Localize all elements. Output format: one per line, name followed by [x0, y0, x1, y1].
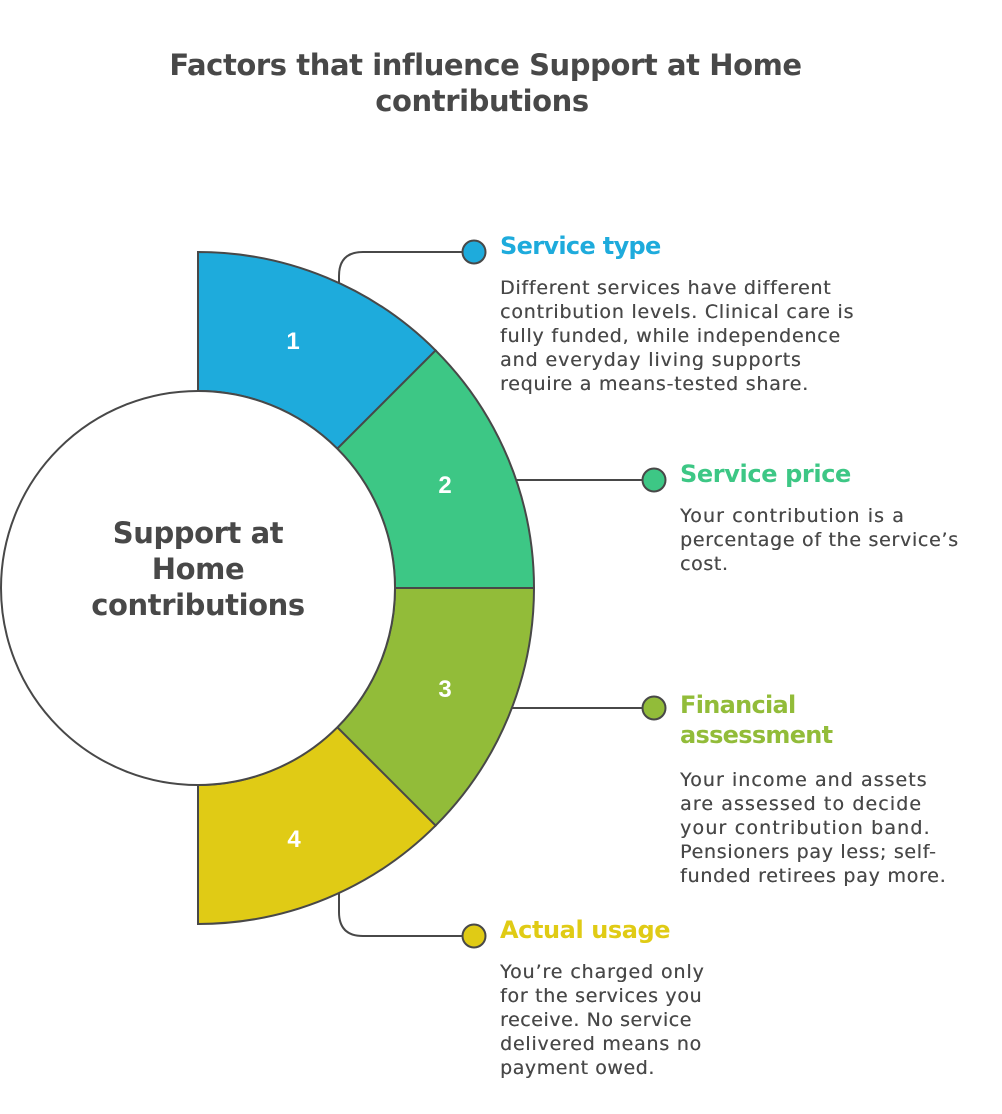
text: service type: Different services have different	[500, 277, 831, 299]
heading: service price: Service price	[680, 460, 851, 488]
text: service type: contribution levels. Clinical care is	[500, 301, 854, 323]
text: actual usage: delivered means no	[500, 1033, 702, 1055]
segment 3	[337, 588, 534, 826]
center label: contributions	[91, 588, 305, 622]
center label	[91, 516, 305, 622]
segment 2	[337, 350, 534, 588]
segment 4	[198, 727, 436, 924]
text: actual usage: for the services you	[500, 985, 702, 1007]
text: financial assessment: Pensioners pay less; self-	[680, 841, 937, 863]
text: service type	[500, 277, 854, 395]
text: actual usage: You’re charged only	[500, 961, 705, 983]
dot: financial assessment	[642, 696, 666, 720]
title	[169, 48, 802, 118]
text: financial assessment: funded retirees pay more.	[680, 865, 946, 887]
text: service price: Your contribution is a	[680, 505, 905, 527]
dot: service price	[642, 468, 666, 492]
number 2: 2	[438, 472, 452, 499]
connector: service type	[339, 252, 474, 285]
segment 1	[198, 252, 436, 449]
heading: financial assessment	[680, 691, 833, 749]
text: actual usage: payment owed.	[500, 1057, 655, 1079]
dot: service type	[462, 240, 486, 264]
text: service type: require a means-tested share.	[500, 373, 809, 395]
text: actual usage: receive. No service	[500, 1009, 692, 1031]
text: financial assessment	[680, 769, 946, 887]
text: service price: cost.	[680, 553, 728, 575]
number 4: 4	[287, 826, 301, 853]
title: contributions	[375, 84, 589, 118]
center label: Support at	[113, 516, 283, 550]
heading: service type: Service type	[500, 232, 661, 260]
title: Factors that influence Support at Home	[169, 48, 802, 82]
center circle	[1, 391, 395, 785]
number 1: 1	[286, 328, 300, 355]
heading: actual usage: Actual usage	[500, 916, 670, 944]
dot: actual usage	[462, 924, 486, 948]
heading: financial assessment: Financial	[680, 691, 796, 719]
text: service price: percentage of the service’s	[680, 529, 959, 551]
connector: financial assessment	[512, 707, 654, 709]
center label: Home	[152, 552, 244, 586]
text: financial assessment: Your income and assets	[680, 769, 928, 791]
text: financial assessment: are assessed to decide	[680, 793, 922, 815]
text: financial assessment: your contribution band.	[680, 817, 931, 839]
text: actual usage	[500, 961, 705, 1079]
text: service price	[680, 505, 959, 575]
text: service type: and everyday living supports	[500, 349, 802, 371]
text: service type: fully funded, while independence	[500, 325, 841, 347]
connector: actual usage	[339, 891, 474, 936]
number 3: 3	[438, 676, 452, 703]
connector: service price	[516, 479, 654, 481]
heading: financial assessment: assessment	[680, 721, 832, 749]
